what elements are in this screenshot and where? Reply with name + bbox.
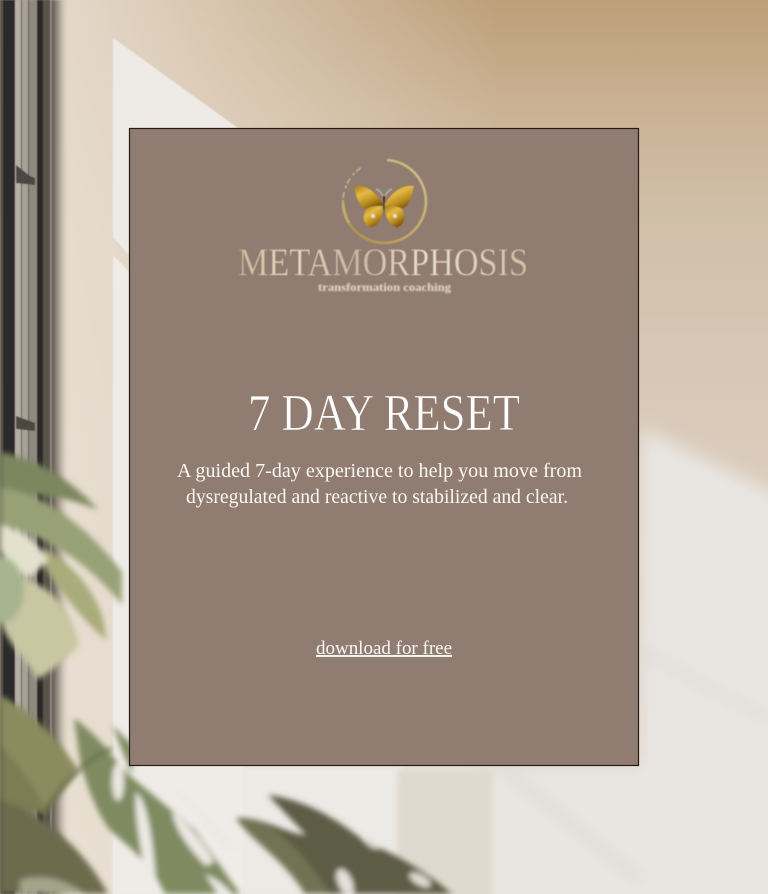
lower left leaf bbox=[0, 695, 108, 894]
subtitle text bbox=[177, 460, 582, 508]
logo wordmark: METAMORPHOSIS bbox=[238, 241, 528, 284]
background: dark window frame bbox=[0, 0, 70, 894]
title: 7 DAY RESET bbox=[248, 385, 520, 442]
logo: Metamorphosis bbox=[238, 160, 528, 294]
background: blurred monstera leaves bbox=[0, 452, 452, 894]
subtitle text: A guided 7-day experience to help you move from bbox=[177, 460, 582, 482]
icon: gold butterfly bbox=[354, 186, 414, 227]
right lower leaf bbox=[236, 795, 452, 894]
icon: gold ring bbox=[343, 160, 426, 243]
logo tagline: transformation coaching bbox=[318, 280, 451, 294]
download link: download for free bbox=[316, 638, 452, 659]
center lower leaf bbox=[45, 718, 240, 894]
upper left leaf bbox=[0, 452, 122, 680]
panel: brown card bbox=[130, 128, 638, 766]
subtitle text: dysregulated and reactive to stabilized and clear. bbox=[186, 486, 568, 508]
